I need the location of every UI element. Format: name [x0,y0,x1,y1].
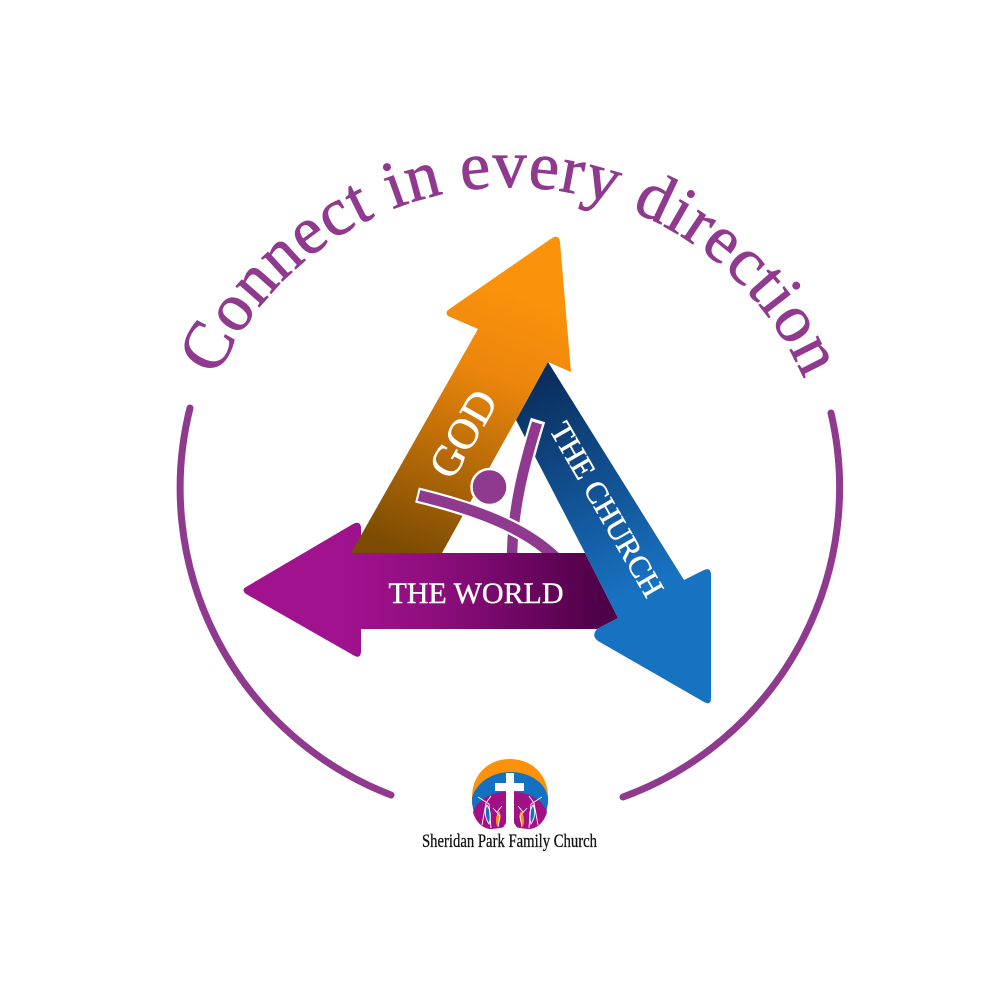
label: The World: THE WORLD [388,577,564,610]
arrow: The Church [516,362,711,703]
logo dome [472,759,548,805]
circle frame [180,408,840,797]
logo: Sheridan Park Family Church [422,759,597,852]
logo magenta lobes [473,792,547,829]
label: The Church: THE CHURCH [543,416,671,603]
label: God: GOD [420,382,508,486]
arrow: The World [244,523,618,657]
arrow: God [351,237,571,553]
infographic [176,155,844,852]
logo blue band [472,772,548,814]
logo dancers [478,796,542,828]
figure arms [415,488,520,540]
logo text: Sheridan Park Family Church [422,831,597,852]
figure head [472,469,508,505]
figure body [525,418,546,457]
logo cross [495,773,524,829]
figure: person with raised arms [417,420,558,560]
title: Connect in every direction [184,155,829,378]
